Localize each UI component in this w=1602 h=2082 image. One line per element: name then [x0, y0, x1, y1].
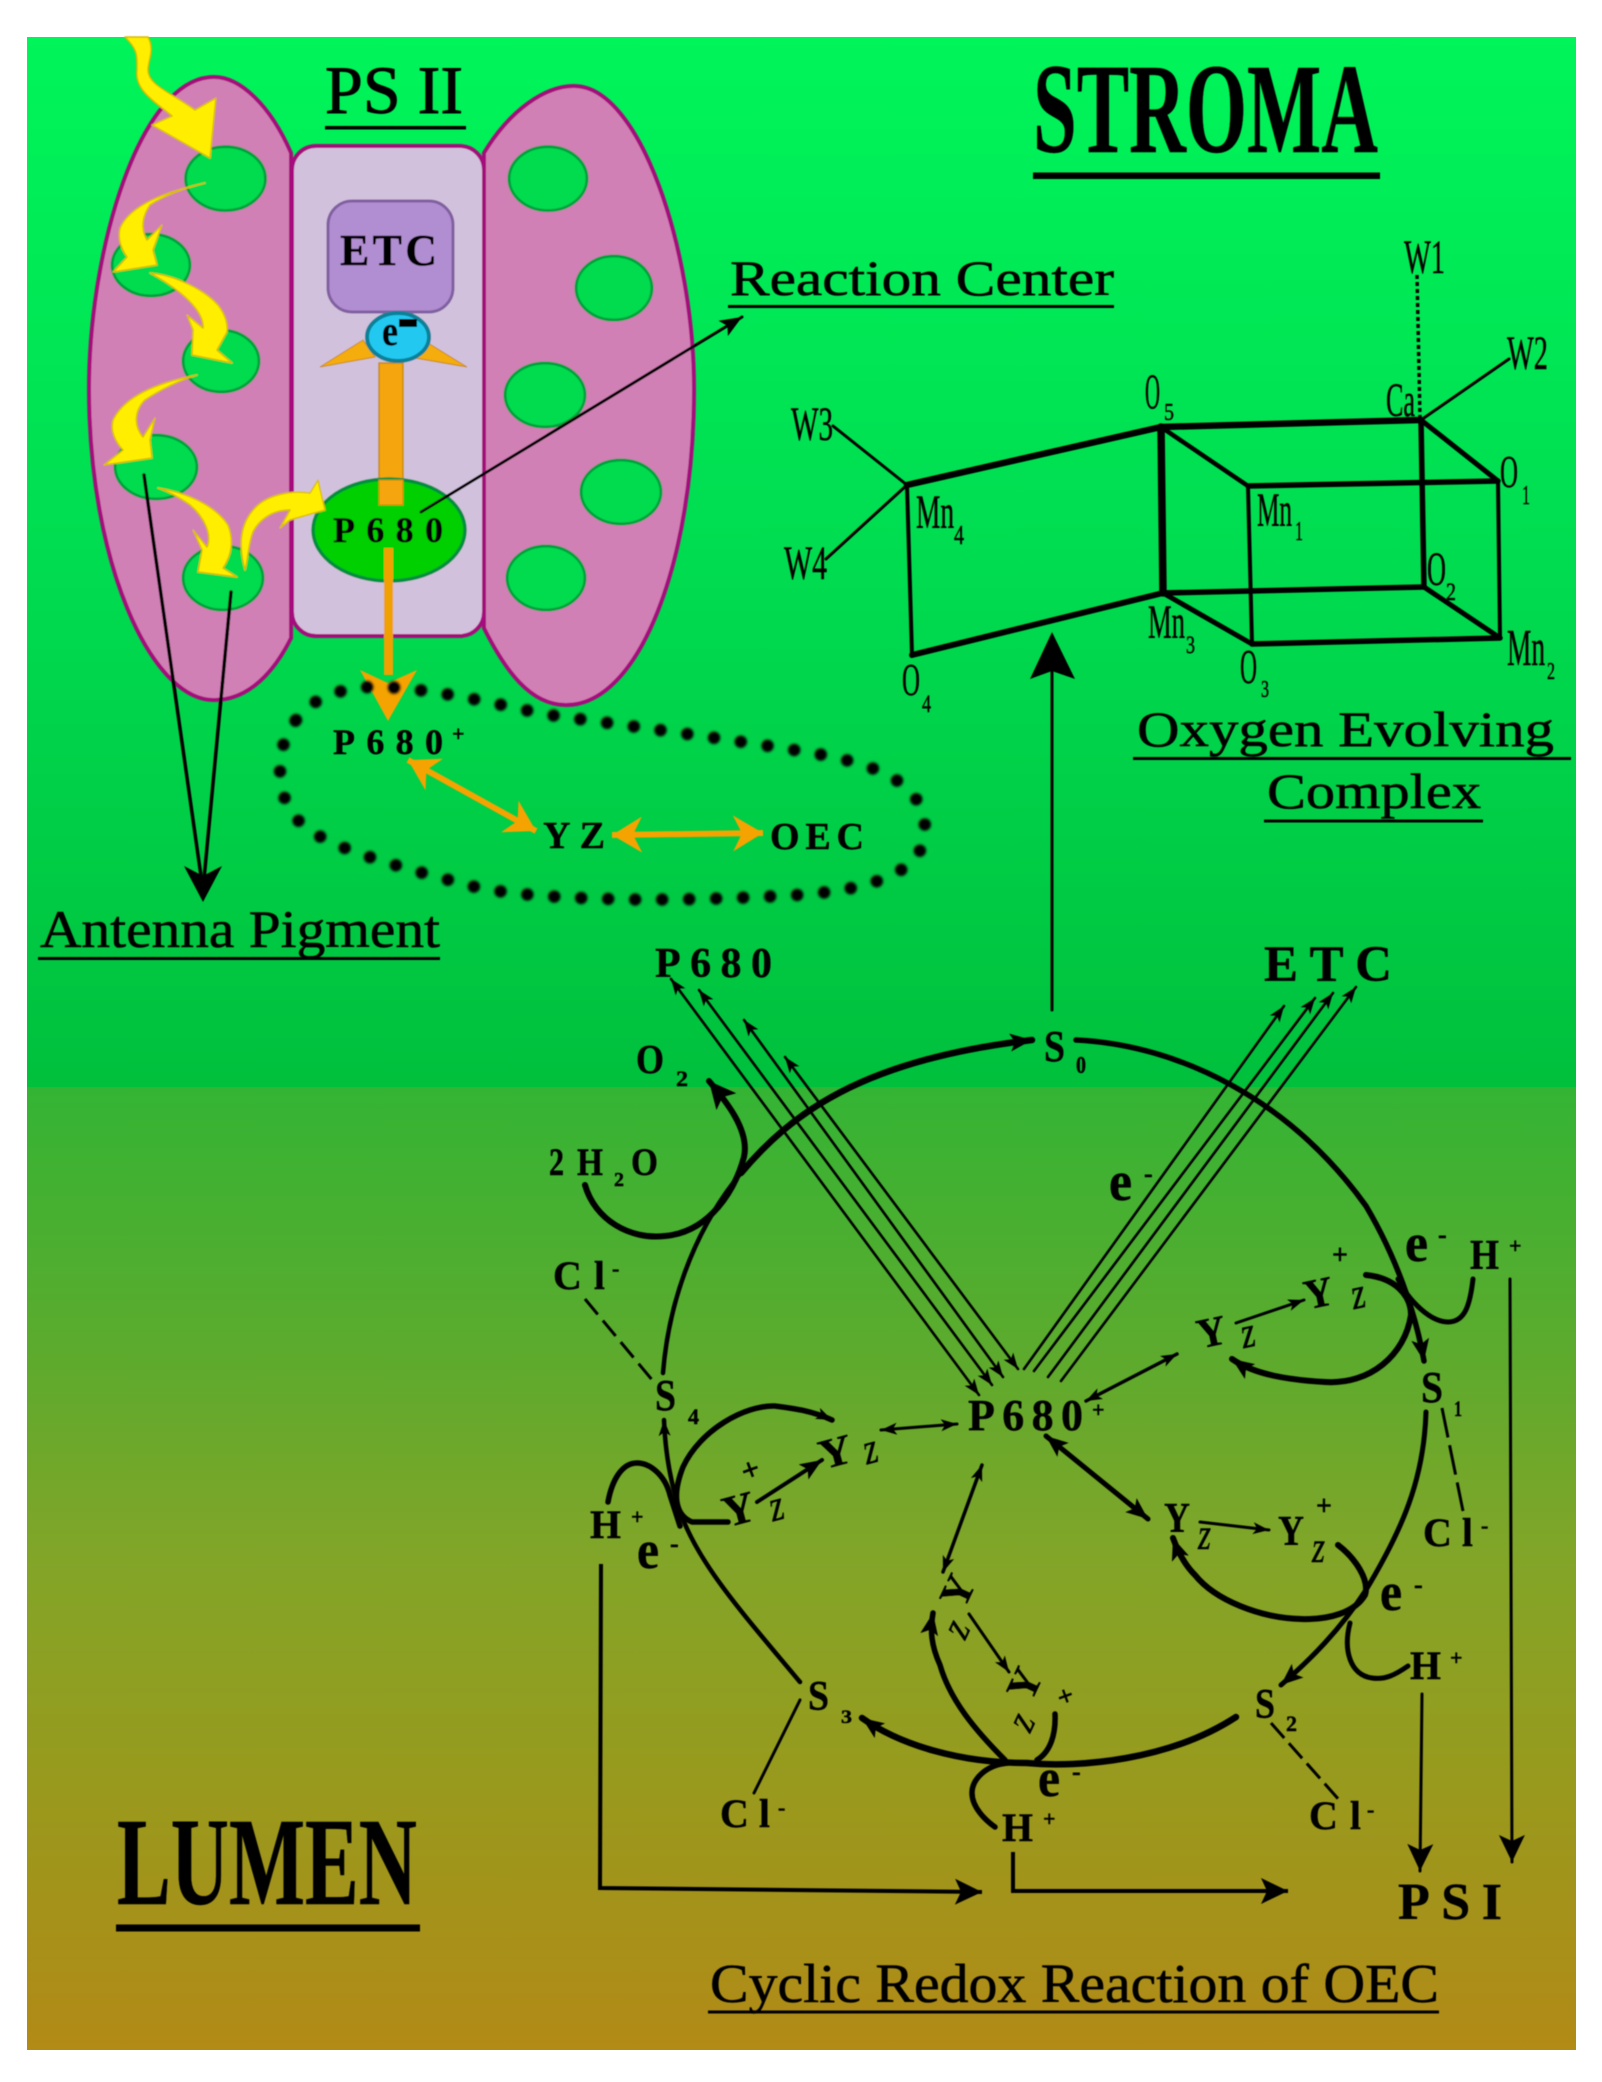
cluster atom labels: 2 — [1547, 659, 1555, 685]
dashed chloride links — [585, 1299, 1463, 1801]
title: LUMEN: LUMEN — [117, 1794, 417, 1932]
cluster atom labels: W2 — [1507, 327, 1548, 380]
arrows P680+ to P680 — [671, 979, 1018, 1395]
left YZ exchange: Y — [717, 1482, 760, 1537]
2H2O label — [549, 1141, 658, 1191]
cluster atom labels: W4 — [784, 537, 827, 590]
S0 label: 0 — [1076, 1053, 1086, 1079]
S0 to S1 arc — [1076, 1040, 1424, 1361]
S1 label — [1421, 1363, 1462, 1421]
left YZ exchange: z — [856, 1423, 883, 1474]
S3 label: S — [808, 1674, 829, 1720]
bottom YZ exchange: Y — [998, 1661, 1053, 1708]
arrow to Reaction Center — [421, 317, 742, 512]
O2 label: O — [636, 1036, 664, 1082]
electron circle — [367, 309, 429, 361]
cluster atom labels: 3 — [1186, 632, 1195, 659]
S2 label: 2 — [1286, 1711, 1297, 1736]
lower right YZ exchange: Y — [1164, 1496, 1190, 1542]
electron labels: e — [1038, 1748, 1060, 1808]
P680+ centre label: + — [1092, 1397, 1105, 1422]
cluster atom labels — [784, 231, 1555, 718]
P680+ centre label: P680 — [968, 1391, 1083, 1440]
lower right YZ exchange: z — [1197, 1510, 1211, 1559]
electron labels — [637, 1151, 1447, 1808]
electron circle: e — [382, 309, 398, 355]
right antenna lobe — [484, 86, 694, 705]
water oxidation curve — [585, 1081, 745, 1237]
proton labels: H — [1470, 1233, 1499, 1279]
electron labels: - — [670, 1529, 679, 1558]
electron labels: e — [1109, 1151, 1132, 1213]
left YZ exchange: z — [762, 1480, 789, 1531]
proton labels: + — [1043, 1806, 1056, 1831]
title: STROMA — [1033, 38, 1380, 180]
S3 to S4 arc — [664, 1420, 800, 1682]
S1 label: S — [1421, 1363, 1443, 1412]
electron labels: - — [1072, 1757, 1081, 1786]
heading: Oxygen Evolving Complex — [1133, 701, 1571, 822]
panel: PS II antenna and reaction center — [89, 37, 694, 721]
chloride labels: Cl — [720, 1791, 770, 1836]
left YZ exchange — [608, 1406, 957, 1537]
cluster atom labels: 5 — [1164, 400, 1174, 426]
S4 label: 4 — [688, 1404, 699, 1429]
antenna pigment pointer arrows — [144, 475, 231, 902]
lower right YZ exchange — [1046, 1436, 1408, 1678]
chloride labels: Cl — [1423, 1510, 1473, 1555]
cluster atom labels: W1 — [1404, 231, 1445, 284]
cluster atom labels: 1 — [1522, 480, 1530, 510]
heading: Oxygen Evolving Complex: Oxygen Evolving — [1137, 701, 1554, 757]
electron labels: e — [1380, 1562, 1402, 1622]
S2 label — [1255, 1682, 1297, 1736]
cluster atom labels: 4 — [954, 520, 964, 550]
S1 label: 1 — [1454, 1396, 1462, 1421]
electron labels: - — [1438, 1220, 1447, 1249]
S0 label: S — [1044, 1022, 1065, 1071]
electron labels: - — [1414, 1570, 1423, 1599]
heading: Oxygen Evolving Complex: Complex — [1267, 763, 1481, 819]
chloride labels: Cl — [553, 1253, 605, 1298]
bottom YZ exchange: Y — [931, 1568, 986, 1615]
label OEC: OEC — [770, 816, 864, 858]
title: LUMEN — [116, 1794, 420, 1932]
left antenna lobe — [89, 77, 291, 700]
upper right YZ exchange: Y — [1300, 1268, 1338, 1319]
proton labels: + — [1509, 1233, 1522, 1258]
orange double arrow P680+ to YZ — [408, 760, 536, 831]
2H2O label: 2 — [614, 1169, 624, 1191]
proton labels: + — [1450, 1645, 1463, 1670]
heading: Cyclic Redox Reaction of OEC: Cyclic Redox Reaction of OEC — [710, 1953, 1439, 2014]
diagram: Mn4CaO5 oxygen evolving cluster — [784, 231, 1555, 718]
dotted boundary around water splitting site — [280, 687, 925, 900]
yellow energy transfer arrows — [104, 37, 325, 577]
lower right YZ exchange: Y — [1278, 1509, 1304, 1555]
P680 green ellipse: P680 — [333, 510, 443, 550]
proton labels: + — [631, 1504, 644, 1529]
chloride labels: - — [1481, 1513, 1488, 1538]
ETC box — [328, 201, 453, 312]
cluster atom labels: 4 — [922, 691, 931, 718]
chloride labels: - — [1367, 1797, 1374, 1822]
upper right YZ exchange: z — [1235, 1307, 1259, 1358]
chart: cyclic S-state redox diagram — [549, 937, 1522, 1931]
P680 plus label: + — [452, 721, 465, 746]
P680 green ellipse — [313, 479, 465, 581]
cluster atom labels: Mn — [916, 486, 954, 539]
S4 to S0 arc — [663, 1040, 1032, 1373]
cluster atom labels: Mn — [1148, 596, 1185, 649]
left YZ exchange: + — [735, 1449, 765, 1489]
label ETC top: ETC — [1264, 937, 1392, 993]
cluster atom labels: O — [902, 655, 920, 705]
proton labels: H — [590, 1502, 621, 1547]
bottom YZ exchange: z — [932, 1613, 980, 1646]
bottom YZ exchange: + — [1053, 1679, 1078, 1714]
orange double arrow YZ to OEC — [612, 833, 763, 835]
upper right YZ exchange: Y — [1193, 1307, 1231, 1358]
orange electron path up from P680 — [320, 340, 467, 505]
upper right YZ exchange — [1086, 1240, 1473, 1401]
label PS I: PSI — [1398, 1874, 1502, 1931]
S4 label — [655, 1371, 699, 1429]
bottom YZ exchange: z — [997, 1706, 1045, 1739]
cluster atom labels: O — [1427, 543, 1446, 596]
2H2O label: H — [577, 1141, 603, 1184]
chloride labels: - — [778, 1795, 785, 1820]
upper right YZ exchange: z — [1345, 1268, 1370, 1319]
O2 label — [636, 1036, 688, 1091]
arrow from S0 up to cluster — [1030, 632, 1075, 1010]
proton labels: H — [1002, 1805, 1033, 1850]
cluster atom labels: O — [1145, 363, 1160, 419]
cluster atom labels: Ca — [1386, 374, 1415, 427]
cluster atom labels: Mn — [1507, 620, 1545, 677]
S2 to S3 arc — [862, 1717, 1236, 1764]
S2 label: S — [1255, 1682, 1275, 1728]
chloride labels — [553, 1253, 1488, 1838]
central reaction center box — [292, 146, 484, 636]
proton arrows along the bottom — [600, 1564, 1288, 1892]
S3 label: 3 — [841, 1707, 852, 1728]
label YZ: YZ — [543, 815, 605, 857]
proton labels: H — [1410, 1643, 1441, 1688]
ETC box: ETC — [340, 226, 437, 275]
cluster atom labels: 3 — [1261, 677, 1269, 703]
electron labels: - — [1144, 1159, 1153, 1188]
electron labels: e — [637, 1520, 659, 1580]
label P680 top: P680 — [655, 941, 772, 987]
S1 to S2 arc — [1281, 1412, 1426, 1685]
chloride labels: Cl — [1309, 1793, 1361, 1838]
title: PS II: PS II — [325, 52, 463, 128]
upper right YZ exchange: + — [1332, 1240, 1348, 1271]
cluster atom labels: O — [1500, 446, 1518, 497]
cluster atom labels: 2 — [1446, 579, 1456, 606]
proton labels — [590, 1233, 1522, 1850]
O2 label: 2 — [676, 1066, 688, 1091]
2H2O label: 2 — [549, 1141, 564, 1184]
S0 label — [1044, 1022, 1086, 1079]
2H2O label: O — [631, 1141, 658, 1184]
cluster atom labels: Mn — [1257, 484, 1292, 537]
orange arrow down to P680+ — [360, 548, 417, 721]
S3 label — [808, 1674, 852, 1728]
title: STROMA: STROMA — [1033, 38, 1378, 180]
chloride labels: - — [612, 1256, 619, 1281]
S4 label: S — [655, 1371, 676, 1420]
left YZ exchange: Y — [814, 1426, 858, 1479]
bottom YZ exchange — [931, 1465, 1078, 1827]
electron labels: e — [1405, 1213, 1428, 1273]
cluster atom labels: O — [1240, 639, 1257, 694]
cluster bonds — [826, 275, 1509, 655]
cluster atom labels: 1 — [1295, 516, 1303, 546]
P680 plus label: P680 — [333, 722, 443, 762]
heading: Reaction Center: Reaction Center — [730, 250, 1114, 306]
arrows P680+ to ETC — [1024, 987, 1356, 1381]
cluster atom labels: W3 — [791, 398, 833, 451]
antenna pigments right — [505, 147, 661, 610]
antenna pigments left — [112, 147, 266, 610]
heading: Antenna Pigment: Antenna Pigment — [40, 901, 440, 959]
lower right YZ exchange: + — [1316, 1491, 1332, 1522]
lower right YZ exchange: z — [1311, 1523, 1325, 1572]
proton arrows to PS I — [1420, 1279, 1512, 1871]
